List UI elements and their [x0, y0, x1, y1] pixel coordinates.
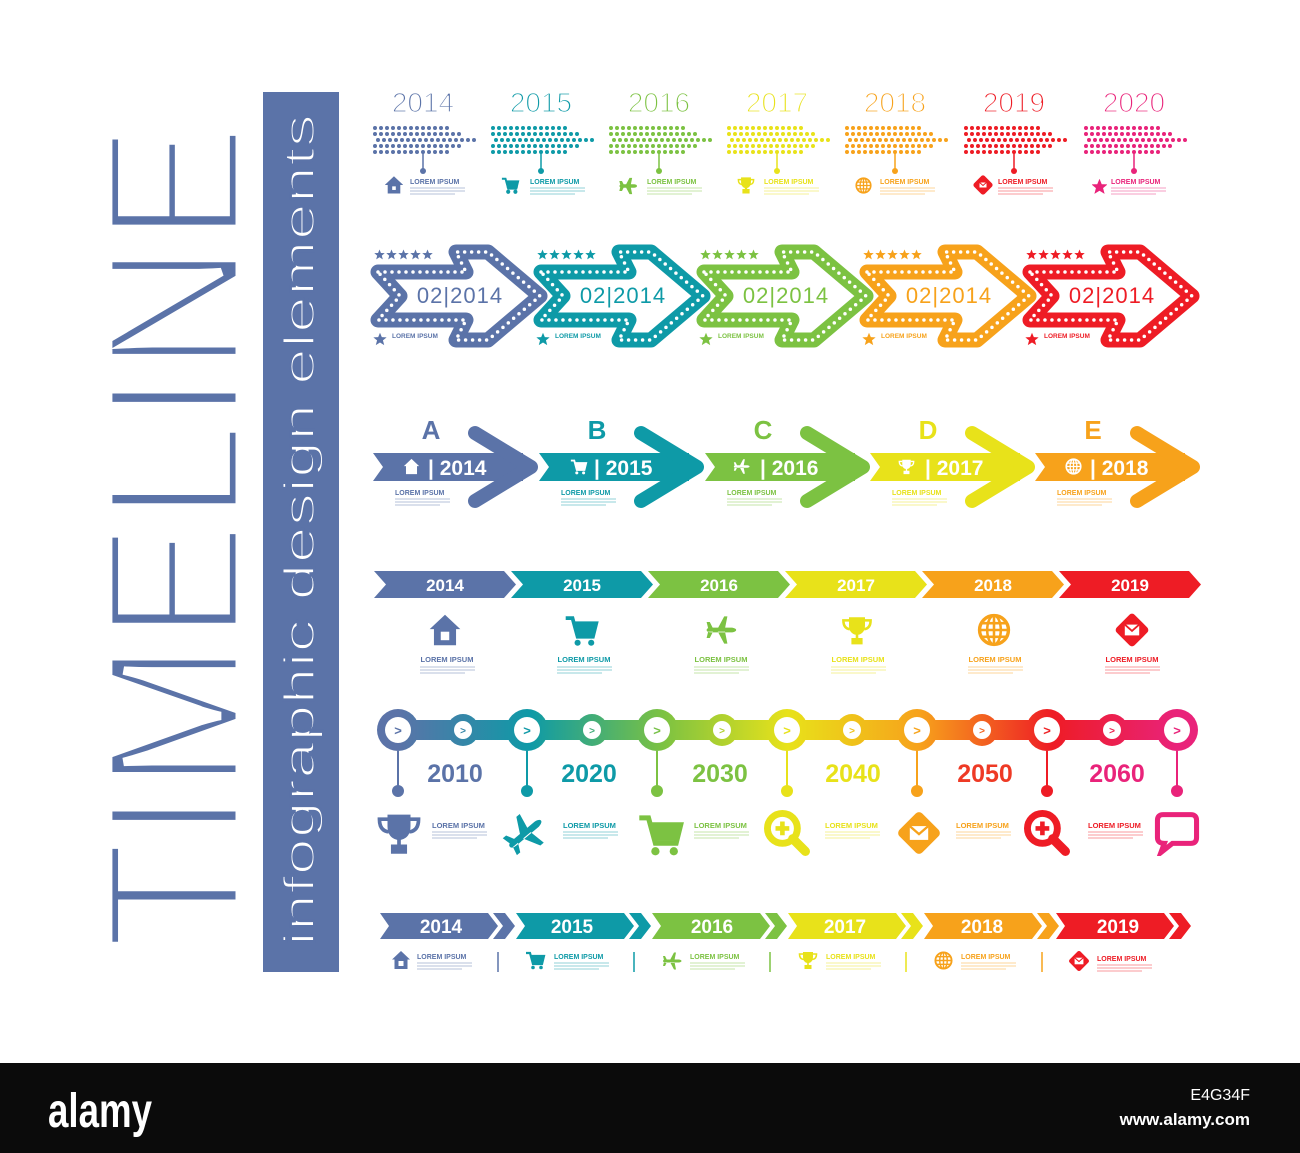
- chain band: >: [1109, 726, 1115, 737]
- segment 2017: LOREM IPSUM: [826, 954, 876, 961]
- segment 2019: LOREM IPSUM: [1097, 956, 1147, 963]
- item 2020: 2020: [1103, 87, 1165, 118]
- arrow A: | 2014: [428, 457, 487, 480]
- chevron blue: [373, 250, 540, 345]
- chevron orange: [862, 250, 1029, 345]
- arrow C: LOREM IPSUM: [727, 490, 777, 497]
- arrow A: A: [422, 415, 441, 445]
- band 2014: 2014: [426, 576, 464, 595]
- decade labels: 2030: [692, 760, 748, 788]
- item 2019: LOREM IPSUM: [998, 179, 1048, 186]
- row 3: lettered arrows A-E: [373, 415, 1193, 505]
- arrow D: D: [919, 415, 937, 445]
- chain band: >: [1043, 723, 1051, 738]
- item 2014: LOREM IPSUM: [410, 179, 460, 186]
- arrow C: [705, 415, 863, 505]
- subtitle panel: infographic design elements: [275, 114, 324, 946]
- band 2015: LOREM IPSUM: [558, 655, 610, 664]
- band 2018: [922, 571, 1064, 673]
- arrow E: E: [1084, 415, 1102, 445]
- item 2020: LOREM IPSUM: [1111, 179, 1161, 186]
- segment 2014: [380, 913, 515, 969]
- chain band: >: [979, 726, 985, 737]
- footer bar: alamy: alamy: [48, 1085, 152, 1138]
- arrow A: [373, 415, 531, 505]
- stems: [392, 751, 1183, 797]
- chevron blue: LOREM IPSUM: [392, 333, 438, 340]
- segment 2014: LOREM IPSUM: [417, 954, 467, 961]
- segment 2018: 2018: [961, 917, 1003, 938]
- decade labels: 2040: [825, 760, 881, 788]
- segment 2019: 2019: [1097, 917, 1139, 938]
- arrow D: LOREM IPSUM: [892, 490, 942, 497]
- item 2015: [493, 87, 594, 194]
- chevron teal: [536, 250, 703, 345]
- footer bar: alamy: E4G34F: [1190, 1087, 1250, 1104]
- chevron red: LOREM IPSUM: [1044, 333, 1090, 340]
- band 2019: 2019: [1111, 576, 1149, 595]
- decade labels: 2060: [1089, 760, 1145, 788]
- arrow A: LOREM IPSUM: [395, 490, 445, 497]
- decade labels: 2020: [561, 760, 617, 788]
- chain icons and captions: LOREM IPSUM: [694, 821, 747, 830]
- chain band: [377, 709, 1198, 751]
- arrow B: LOREM IPSUM: [561, 490, 611, 497]
- segment 2018: LOREM IPSUM: [961, 954, 1011, 961]
- segment 2015: 2015: [551, 917, 594, 938]
- item 2017: [729, 87, 830, 194]
- segment 2015: [516, 913, 651, 969]
- arrow D: [870, 415, 1028, 505]
- arrow E: [1035, 415, 1193, 505]
- chevron red: 02|2014: [1069, 283, 1155, 308]
- band 2016: LOREM IPSUM: [695, 655, 747, 664]
- item 2016: 2016: [628, 87, 690, 118]
- chevron blue: 02|2014: [417, 283, 503, 308]
- item 2018: [847, 87, 948, 194]
- item 2016: [611, 87, 712, 194]
- chain icons and captions: [379, 806, 1197, 861]
- chain band: >: [913, 723, 921, 738]
- chevron green: [699, 250, 866, 345]
- item 2015: LOREM IPSUM: [530, 179, 580, 186]
- chain icons and captions: LOREM IPSUM: [1088, 821, 1141, 830]
- item 2015: 2015: [510, 87, 572, 118]
- segment 2014: 2014: [420, 917, 463, 938]
- arrow E: LOREM IPSUM: [1057, 490, 1107, 497]
- segment 2016: [652, 913, 787, 970]
- chain icons and captions: LOREM IPSUM: [563, 821, 616, 830]
- chain band: >: [653, 723, 661, 738]
- item 2017: LOREM IPSUM: [764, 179, 814, 186]
- chevron teal: 02|2014: [580, 283, 666, 308]
- title: TIMELINE: TIMELINE: [66, 124, 281, 950]
- band 2016: [648, 571, 790, 673]
- band 2018: 2018: [974, 576, 1012, 595]
- band 2018: LOREM IPSUM: [969, 655, 1021, 664]
- band 2015: 2015: [563, 576, 601, 595]
- chain band: >: [783, 723, 791, 738]
- segment 2018: [924, 913, 1059, 969]
- segment 2019: [1056, 913, 1191, 972]
- chevron teal: LOREM IPSUM: [555, 333, 601, 340]
- item 2018: 2018: [864, 87, 926, 118]
- chain icons and captions: LOREM IPSUM: [825, 821, 878, 830]
- segment 2017: 2017: [824, 917, 866, 938]
- item 2019: 2019: [983, 87, 1045, 118]
- footer bar: alamy: [0, 1063, 1300, 1153]
- chevron red: [1025, 250, 1192, 345]
- row 1: dotted arrows timeline: [375, 87, 1187, 195]
- band 2017: 2017: [837, 576, 875, 595]
- item 2018: LOREM IPSUM: [880, 179, 930, 186]
- chevron orange: LOREM IPSUM: [881, 333, 927, 340]
- band 2015: [511, 571, 653, 673]
- chevron green: 02|2014: [743, 283, 829, 308]
- segment 2017: [788, 913, 923, 969]
- chain band: >: [394, 723, 402, 738]
- band 2014: LOREM IPSUM: [421, 655, 473, 664]
- arrow B: B: [588, 415, 606, 445]
- chain band: >: [523, 723, 531, 738]
- item 2014: [375, 87, 476, 194]
- band 2014: [374, 571, 516, 673]
- segment 2015: LOREM IPSUM: [554, 954, 604, 961]
- chevron orange: 02|2014: [906, 283, 992, 308]
- chain band: >: [589, 726, 595, 737]
- chevron green: LOREM IPSUM: [718, 333, 764, 340]
- band 2017: [785, 571, 927, 673]
- footer bar: alamy: www.alamy.com: [1119, 1110, 1250, 1129]
- decade labels: 2050: [957, 760, 1013, 788]
- arrow B: [539, 415, 697, 505]
- chain icons and captions: LOREM IPSUM: [956, 821, 1009, 830]
- band 2017: LOREM IPSUM: [832, 655, 884, 664]
- arrow E: | 2018: [1090, 457, 1149, 480]
- band 2019: [1059, 571, 1201, 673]
- item 2019: [966, 87, 1067, 195]
- segment 2016: 2016: [691, 917, 733, 938]
- item 2014: 2014: [392, 87, 454, 118]
- arrow B: | 2015: [594, 457, 653, 480]
- chain icons and captions: LOREM IPSUM: [432, 821, 485, 830]
- band 2016: 2016: [700, 576, 738, 595]
- arrow D: | 2017: [925, 457, 983, 480]
- decade labels: [427, 760, 1145, 788]
- row 5: chain timeline: [377, 709, 1198, 861]
- band 2019: LOREM IPSUM: [1106, 655, 1158, 664]
- chain band: >: [849, 726, 855, 737]
- chain band: >: [460, 726, 466, 737]
- row 6: double chevron timeline: [380, 913, 1191, 972]
- segment 2016: LOREM IPSUM: [690, 954, 740, 961]
- chain band: >: [719, 726, 725, 737]
- arrow C: C: [754, 415, 773, 445]
- decade labels: 2010: [427, 760, 483, 788]
- chain band: >: [1173, 723, 1181, 738]
- row 4: chevron band timeline: [374, 571, 1201, 673]
- row 2: outlined dotted chevron arrows: [373, 250, 1192, 345]
- item 2017: 2017: [746, 87, 808, 118]
- arrow C: | 2016: [760, 457, 818, 480]
- item 2020: [1086, 87, 1187, 194]
- item 2016: LOREM IPSUM: [647, 179, 697, 186]
- subtitle panel: [263, 92, 339, 972]
